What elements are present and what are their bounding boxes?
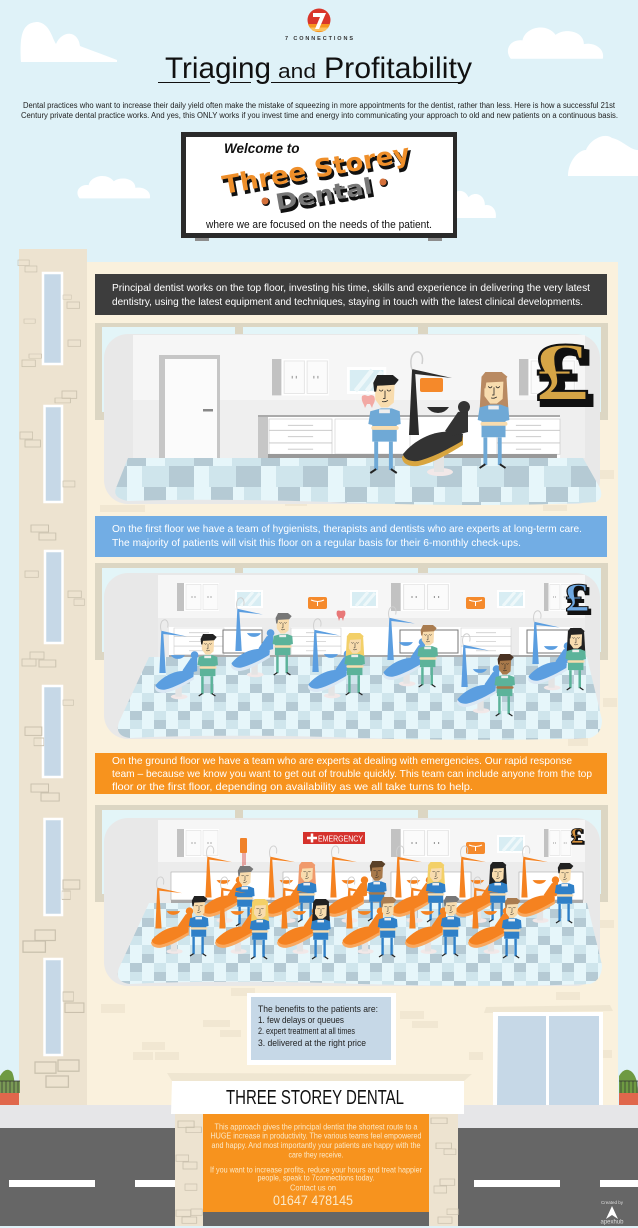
- orange lamp tray: [420, 378, 443, 392]
- tooth icon: [337, 611, 345, 621]
- benefits box: 1. few delays or queues: [258, 1015, 344, 1025]
- floor 3 header: principal dentist: [95, 274, 607, 315]
- tower windows: [43, 273, 62, 1055]
- orange call to action panel: and happy. And most importantly your patients are happy with the: [212, 1140, 421, 1150]
- logo: 7 Connections: [285, 8, 353, 42]
- building tower: [19, 249, 87, 1105]
- creator logo: Created by: [601, 1200, 624, 1205]
- first floor room scene: [95, 563, 608, 740]
- hedges and fences: [0, 1070, 638, 1105]
- tower bricks: [18, 260, 84, 1087]
- clouds: [21, 22, 638, 218]
- intro text: Century private dental practice works. And yes, this ONLY works if you invest time and energy into communicating your approach to old and new patients on a continuous basis.: [21, 111, 618, 120]
- floor 3 header: principal dentist: Principal dentist works on the top floor, investing his time, skills and experience in delivering the very latest: [112, 283, 590, 294]
- ground floor header: On the ground floor we have a team who are experts at dealing with emergencies. Our rapid response: [112, 756, 572, 767]
- cabinets and mirror: [272, 359, 576, 395]
- welcome billboard: Dental: [274, 174, 375, 216]
- orange call to action panel: care they receive.: [288, 1150, 344, 1160]
- pound symbol: £: [570, 824, 584, 848]
- road: [0, 1128, 638, 1226]
- floor 3 header: principal dentist: dentistry, using the latest equipment and techniques, staying in touch with the latest clinical developments.: [112, 297, 583, 308]
- intro text: [21, 101, 618, 120]
- benefits box: 3. delivered at the right price: [258, 1038, 366, 1048]
- orange call to action panel: 01647 478145: [273, 1192, 353, 1208]
- first floor header: The majority of patients will visit this floor on a regular basis for their 6-monthly check-ups.: [112, 538, 521, 549]
- emergency sign: [303, 832, 365, 844]
- title: Triaging: [165, 52, 271, 85]
- pound symbol: £: [564, 576, 590, 620]
- intro text: Dental practices who want to increase their daily yield often make the mistake of squeezing in more appointments for the dentist, rather than less. Here is how a successful 21st: [23, 101, 616, 110]
- welcome billboard: [181, 132, 457, 238]
- checkered floor: [118, 657, 602, 740]
- right side door: [484, 1005, 613, 1105]
- wall phone: [240, 838, 247, 866]
- creator logo: apexhub: [600, 1220, 624, 1226]
- creator logo: [600, 1200, 624, 1226]
- benefits box: 2. expert treatment at all times: [258, 1026, 355, 1036]
- orange call to action panel: people, speak to 7connections today.: [258, 1172, 374, 1182]
- sign post stubs: [195, 236, 442, 241]
- pavement: [0, 1105, 638, 1128]
- dentist man: [368, 375, 401, 473]
- dental chair: [402, 352, 470, 476]
- ground floor header: team – because we know you want to get out of trouble quickly. This team can include anyone from the top: [112, 769, 592, 780]
- dentist woman: [478, 372, 509, 468]
- orange call to action panel: [203, 1114, 429, 1212]
- emergency sign: EMERGENCY: [318, 834, 363, 844]
- welcome billboard: Dental: [276, 177, 377, 219]
- orange call to action panel: HUGE increase in productivity. The various teams feel empowered: [210, 1130, 422, 1140]
- counter with drawers: [258, 415, 560, 458]
- welcome billboard: Three Storey: [222, 141, 414, 203]
- first floor header: On the first floor we have a team of hygienists, therapists and dentists who are experts at long-term care.: [112, 524, 582, 535]
- tooth icon: [362, 395, 375, 408]
- door: [159, 355, 220, 458]
- counters: [169, 627, 573, 657]
- pound symbol: £: [566, 579, 592, 623]
- orange call to action panel: If you want to increase profits, reduce your hours and treat happier: [210, 1164, 422, 1174]
- welcome billboard: Three Storey: [220, 138, 412, 200]
- wall cabinets, case and mirror: [177, 829, 571, 857]
- pound symbol: £: [571, 825, 585, 849]
- counters: [171, 872, 583, 903]
- first floor header: [95, 516, 607, 557]
- benefits box: [247, 993, 396, 1065]
- welcome billboard: Welcome to: [224, 141, 300, 156]
- orange call to action panel: This approach gives the principal dentist the shortest route to a: [214, 1122, 418, 1132]
- ground floor room scene: [95, 805, 608, 986]
- wall bricks: [100, 470, 617, 1060]
- orange call to action panel: Contact us on: [290, 1182, 336, 1192]
- entrance pillars: [175, 1113, 458, 1226]
- building main wall: [87, 262, 618, 1105]
- big pound symbol: £: [534, 325, 590, 419]
- title: [158, 52, 472, 85]
- chairs and hygienists: [155, 598, 586, 716]
- checkered floor: [118, 903, 602, 986]
- big pound symbol: £: [538, 330, 594, 424]
- wall cabinets, mirrors and cases: [177, 583, 571, 611]
- front row chairs and team: [151, 877, 522, 959]
- ground floor header: [95, 753, 607, 794]
- logo: 7 Connections: 7 CONNECTIONS: [285, 36, 353, 42]
- entrance fascia sign: THREE STOREY DENTAL: [226, 1087, 404, 1109]
- entrance fascia sign: [167, 1073, 472, 1114]
- ground floor header: floor or the first floor, depending on availability as we all take turns to help.: [112, 782, 473, 793]
- welcome billboard: where we are focused on the needs of the patient.: [205, 219, 432, 231]
- benefits box: The benefits to the patients are:: [258, 1004, 378, 1014]
- back row chairs and team: [201, 846, 575, 926]
- title: and: [278, 61, 316, 83]
- title: Profitability: [324, 52, 472, 85]
- top floor room scene: [95, 323, 608, 505]
- checkered floor: [115, 458, 601, 505]
